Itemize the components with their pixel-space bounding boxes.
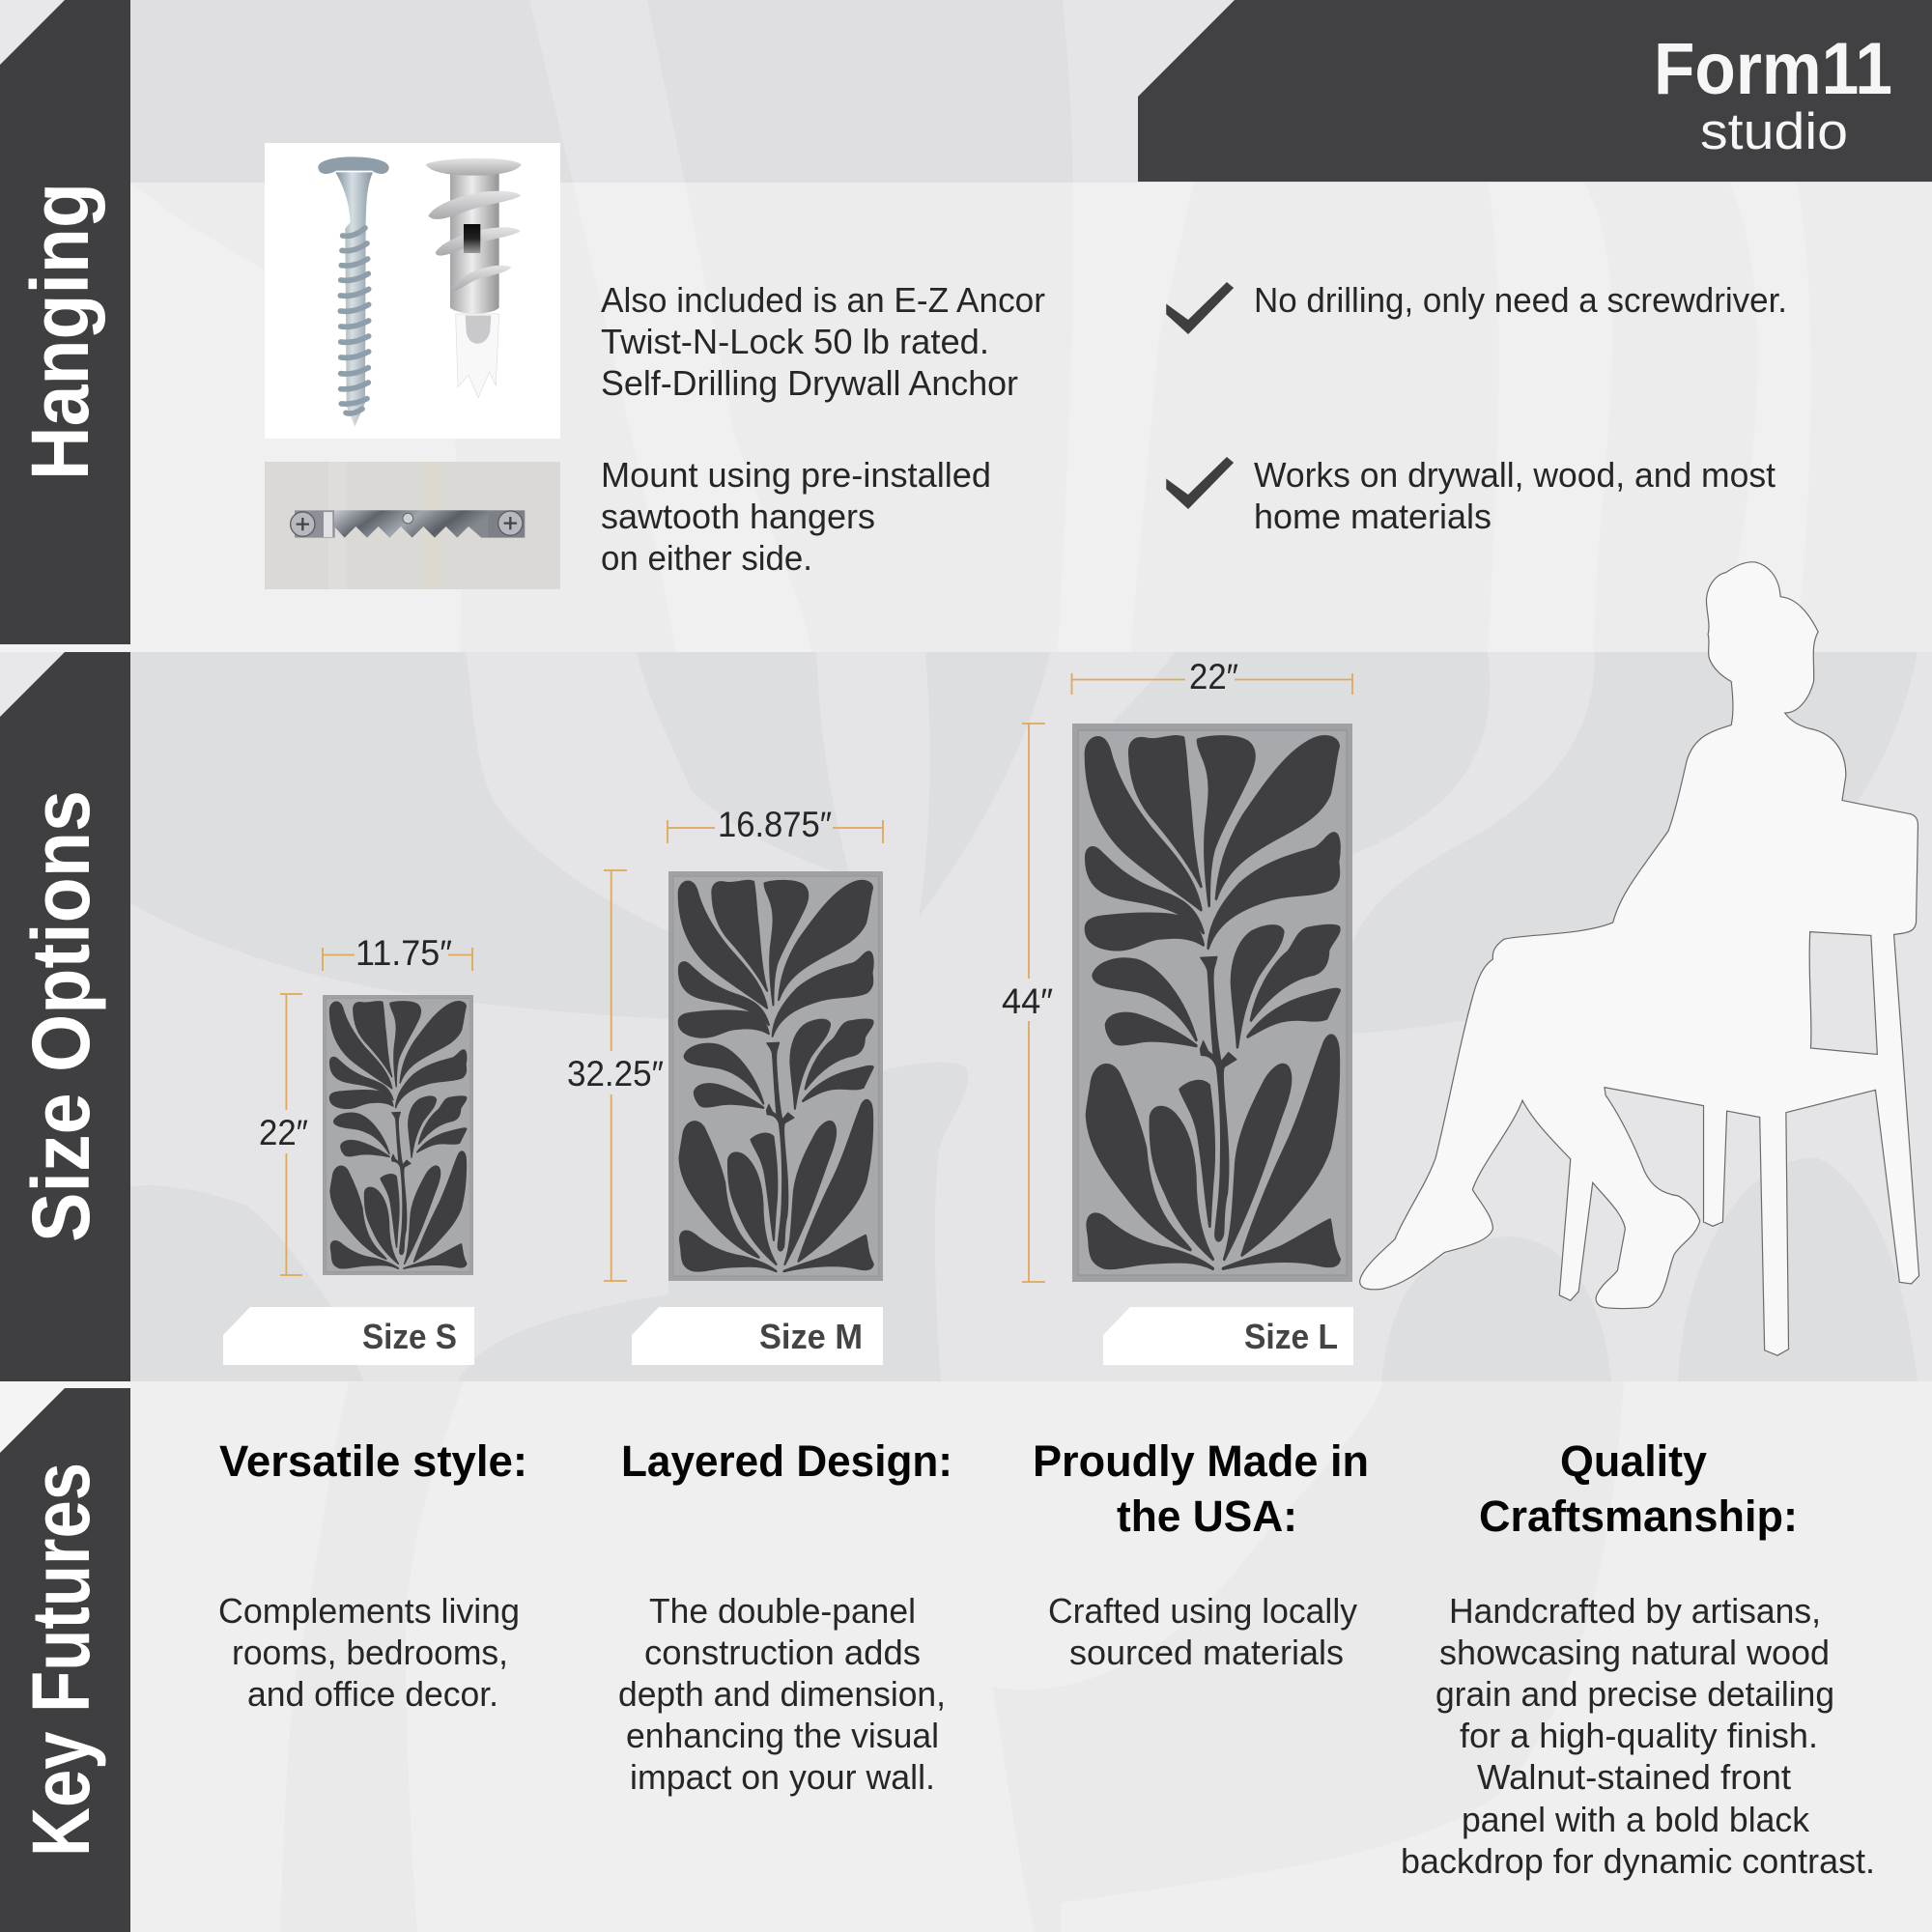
dimension: width 16.875: 16.875″ xyxy=(718,805,832,844)
dimension: width 11.75: 22″ xyxy=(259,1113,308,1152)
text block: versatile style description: and office decor. xyxy=(247,1674,498,1714)
heading: Quality Craftsmanship xyxy=(1479,1436,1798,1541)
heading: Proudly Made in the USA: Proudly Made in xyxy=(1033,1436,1369,1486)
dimension: width 11.75 xyxy=(259,933,472,1275)
heading: Hanging: Hanging xyxy=(14,183,105,480)
text block: made in USA description xyxy=(1048,1591,1357,1672)
dimension: width 16.875 xyxy=(567,805,883,1281)
dimension: width 22 xyxy=(1002,657,1352,1282)
text block: layered design description: enhancing the visual xyxy=(626,1716,939,1755)
text block: craftsmanship description: panel with a bold black xyxy=(1462,1800,1810,1839)
text block: craftsmanship description: for a high-quality finish. xyxy=(1460,1716,1818,1755)
side tab: Hanging xyxy=(0,0,130,644)
heading: Key Futures: Key Futures xyxy=(15,1463,106,1857)
icon: check mark 1 xyxy=(1167,283,1233,333)
artwork: size M panel xyxy=(668,871,883,1281)
label: Size S xyxy=(223,1307,474,1365)
text block: E-Z Ancor: Also included is an E-Z Ancor xyxy=(601,280,1045,320)
text block: E-Z Ancor: Twist-N-Lock 50 lb rated. xyxy=(601,322,989,361)
panel: size S xyxy=(223,933,474,1365)
benefit: works on materials: Works on drywall, wood, and most xyxy=(1254,455,1776,495)
image: sawtooth hanger on wood xyxy=(265,462,560,589)
text block: craftsmanship description xyxy=(1401,1591,1875,1881)
benefit: works on materials: home materials xyxy=(1254,497,1492,536)
text block: sawtooth hangers: on either side. xyxy=(601,538,812,578)
dimension: width 22: 22″ xyxy=(1189,657,1238,696)
text block: versatile style description xyxy=(218,1591,520,1714)
feature: made in the USA xyxy=(1033,1436,1369,1672)
dimension: width 11.75: 11.75″ xyxy=(355,933,452,973)
text block: craftsmanship description: backdrop for dynamic contrast. xyxy=(1401,1841,1875,1881)
benefit: no drilling: No drilling, only need a screwdriver. xyxy=(1254,280,1787,320)
icon: drywall anchor xyxy=(426,158,522,398)
feature: versatile style xyxy=(218,1436,527,1714)
text block: craftsmanship description: Walnut-stained front xyxy=(1477,1757,1791,1797)
text block: layered design description: The double-panel xyxy=(649,1591,916,1631)
panel: size L xyxy=(1002,657,1353,1365)
side tab: Key Futures xyxy=(0,1388,130,1932)
label: Size L xyxy=(1103,1307,1353,1365)
feature: layered design xyxy=(618,1436,952,1797)
silhouette: seated person on chair xyxy=(1359,561,1920,1356)
text block: E-Z Ancor: Self-Drilling Drywall Anchor xyxy=(601,363,1018,403)
logo: studio: studio xyxy=(1700,103,1848,160)
dimension: width 16.875: 32.25″ xyxy=(567,1054,664,1094)
text block: versatile style description: Complements living xyxy=(218,1591,520,1631)
icon: screw xyxy=(318,156,389,427)
text block: E-Z Ancor xyxy=(601,280,1045,403)
logo banner xyxy=(1138,0,1932,182)
panel: size M xyxy=(567,805,883,1365)
heading: Proudly Made in the USA xyxy=(1033,1436,1369,1541)
text block: sawtooth hangers: sawtooth hangers xyxy=(601,497,875,536)
dimension: width 22: 44″ xyxy=(1002,981,1053,1021)
text block: sawtooth hangers: Mount using pre-installed xyxy=(601,455,991,495)
heading: Quality Craftsmanship: Craftsmanship: xyxy=(1479,1492,1798,1541)
feature: quality craftsmanship xyxy=(1401,1436,1875,1881)
image: screw and drywall anchor xyxy=(265,143,560,439)
artwork: size L panel xyxy=(1072,724,1352,1282)
text block: layered design description: impact on your wall. xyxy=(630,1757,935,1797)
text block: craftsmanship description: Handcrafted by artisans, xyxy=(1449,1591,1821,1631)
label: Size S: Size S xyxy=(362,1317,457,1356)
heading: Versatile style: Versatile style: xyxy=(219,1436,527,1486)
heading: Quality Craftsmanship: Quality xyxy=(1560,1436,1707,1486)
benefit: works on materials xyxy=(1254,455,1776,536)
text block: layered design description xyxy=(618,1591,946,1797)
label: Size L: Size L xyxy=(1244,1317,1338,1356)
text block: made in USA description: sourced materials xyxy=(1069,1633,1344,1672)
text block: sawtooth hangers xyxy=(601,455,991,578)
text block: layered design description: depth and dimension, xyxy=(618,1674,946,1714)
icon: check mark 2 xyxy=(1167,458,1233,508)
side tab: Size Options xyxy=(0,652,130,1381)
label: Size M: Size M xyxy=(759,1317,863,1356)
artwork: size S panel xyxy=(323,995,473,1275)
text block: layered design description: construction adds xyxy=(644,1633,921,1672)
heading: Proudly Made in the USA: the USA: xyxy=(1117,1492,1297,1541)
label: Size M xyxy=(632,1307,883,1365)
text block: craftsmanship description: showcasing natural wood xyxy=(1439,1633,1830,1672)
logo: Form11: Form11 xyxy=(1654,28,1892,110)
text block: craftsmanship description: grain and precise detailing xyxy=(1435,1674,1834,1714)
heading: Size Options: Size Options xyxy=(15,790,106,1242)
heading: Layered Design: Layered Design: xyxy=(621,1436,952,1486)
text block: versatile style description: rooms, bedrooms, xyxy=(232,1633,508,1672)
text block: made in USA description: Crafted using locally xyxy=(1048,1591,1357,1631)
